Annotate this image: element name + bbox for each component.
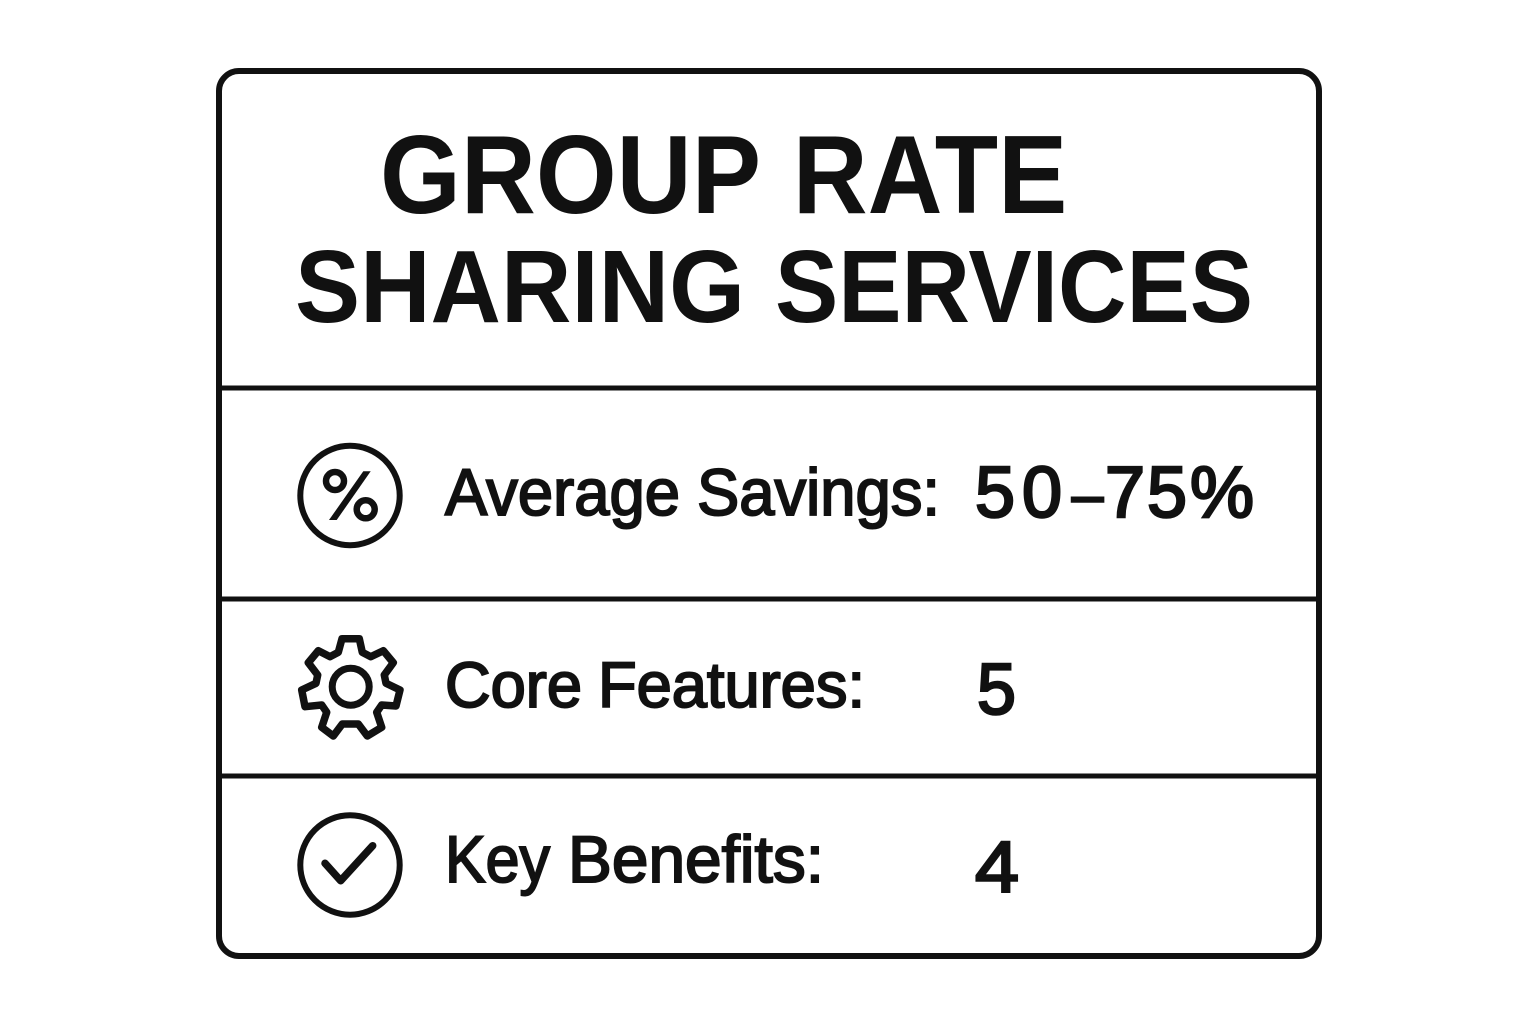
value: 50–75%: 5 xyxy=(975,453,1015,533)
icon: percent in circle xyxy=(300,446,400,545)
row: average savings xyxy=(300,446,1254,545)
label: key benefits xyxy=(445,822,824,896)
title xyxy=(295,113,1253,344)
label: average savings: Average xyxy=(445,455,680,529)
label: key benefits: Key xyxy=(445,822,550,896)
label: average savings: Savings: xyxy=(697,455,940,529)
title line 2: SERVICES xyxy=(775,229,1253,344)
value: 4: 4 xyxy=(975,828,1019,908)
label: average savings xyxy=(445,455,940,529)
title line 2: SHARING xyxy=(295,229,745,344)
value: 50–75%: 7 xyxy=(1105,453,1145,533)
value: 50–75%: % xyxy=(1190,453,1254,533)
title line 1: RATE xyxy=(793,113,1067,237)
value: 5: 5 xyxy=(977,650,1016,730)
value: 50–75%: 5 xyxy=(1147,453,1187,533)
panel: outer card frame xyxy=(219,71,1319,956)
row: core features xyxy=(302,639,1016,736)
title line 1: GROUP xyxy=(380,113,761,237)
title line 2 xyxy=(295,229,1253,344)
icon: check in circle xyxy=(300,815,400,915)
label: key benefits: Benefits: xyxy=(568,822,824,896)
value: 50–75%: – xyxy=(1072,463,1104,526)
label: core features: Core xyxy=(445,649,582,721)
label: core features xyxy=(445,649,865,721)
label: core features: Features: xyxy=(598,649,865,721)
row: key benefits xyxy=(300,815,1019,915)
icon: gear xyxy=(302,639,400,736)
title line 1 xyxy=(380,113,1067,237)
value: 50–75%: 0 xyxy=(1022,453,1062,533)
